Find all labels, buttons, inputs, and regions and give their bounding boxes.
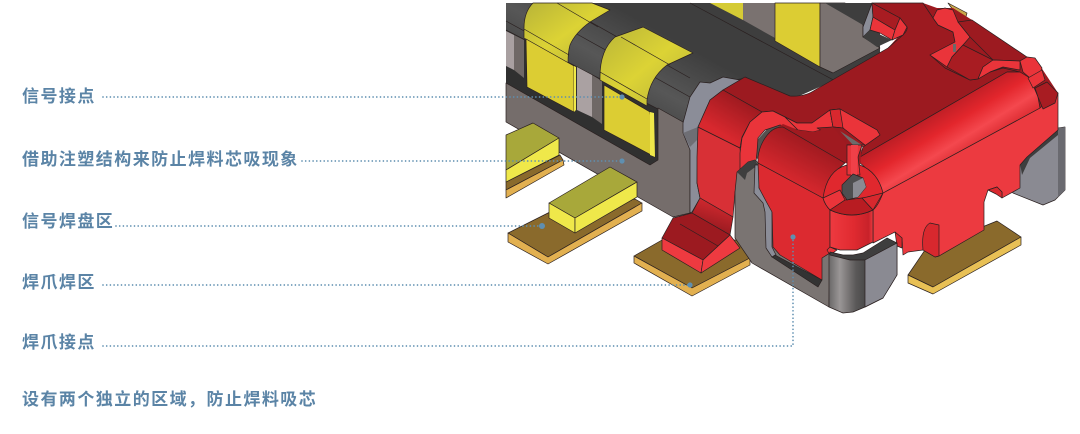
claw: corner foot tab [827,247,837,255]
contact: right signal contact [600,27,693,157]
connector illustration [506,3,1065,313]
pad: claw solder pad right [908,221,1021,294]
claw: right end cap [1020,57,1058,109]
claw: right skirt [873,93,1058,257]
claw: tab front face [758,163,830,280]
pad: left signal pad [506,123,564,198]
leader: molded structure [302,158,625,164]
claw: top underlay [860,3,1058,193]
pad: claw solder pad left [634,240,750,296]
claw: vertical corner cylinder [830,208,873,250]
claw: top notch [863,3,907,47]
leader: claw contact [103,234,796,346]
claw: right notch [930,8,1027,80]
claw: tab rear surface [770,124,862,165]
contact: left signal contact [524,3,610,112]
contact: back contacts [710,3,880,73]
gray back pillars [506,31,602,124]
leader: claw solder area [103,282,693,288]
molded gray wall [506,83,690,217]
label: signal contact: 信号接点 [22,87,96,106]
label: claw contact: 焊爪接点 [22,333,96,352]
red solder claw [662,3,1058,313]
claw: sphere corner [823,145,883,215]
claw: side face [697,127,742,217]
claw: flat top [723,3,1020,157]
pad: signal solder pad with yellow block [508,167,642,264]
leader: signal contact [103,94,625,100]
label: two separate zones: 设有两个独立的区域，防止焊料吸芯 [22,389,317,409]
claw: foot [662,198,740,273]
label: molded structure: 借助注塑结构来防止焊料芯吸现象 [22,149,299,169]
pad gold tip [948,3,967,20]
claw: opening ring [740,109,880,172]
label: claw solder area: 焊爪焊区 [22,273,96,292]
claw: curved shoulder [698,90,762,148]
claw: tab top [758,127,845,198]
claw: long cylinder [860,72,1040,193]
claw: front gray pillar [829,238,897,313]
dark housing band [506,3,880,172]
claw gray wall [735,160,830,307]
label: signal pad: 信号焊盘区 [22,211,114,231]
right gray pillar [1010,127,1065,205]
leader: signal pad [116,223,545,229]
blue-gray end cap [683,77,740,213]
